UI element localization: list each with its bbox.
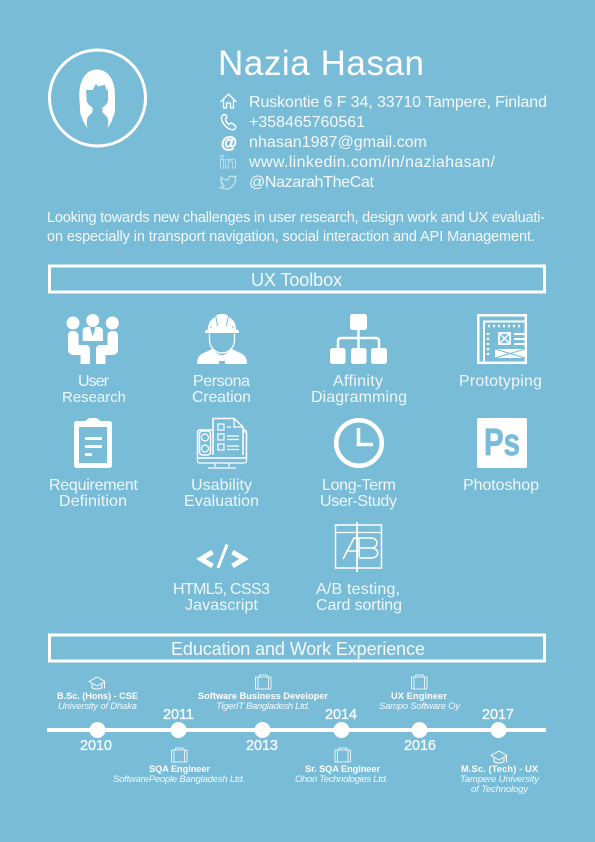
name heading: Nazia Hasan <box>218 44 424 83</box>
label <box>62 373 126 406</box>
entry: SQA Engineer: SoftwarePeople Bangladesh Ltd. <box>113 774 245 785</box>
entry: BSc: University of Dhaka <box>58 701 137 712</box>
tool: a/b testing <box>316 522 402 614</box>
label: Javascript <box>185 597 259 614</box>
entry: Sr. SQA Engineer <box>295 748 388 785</box>
label <box>192 373 251 406</box>
label: Creation <box>192 389 251 406</box>
label: Long-Term <box>322 477 396 494</box>
label: Photoshop <box>463 477 539 494</box>
year labels: 2010 <box>80 738 112 754</box>
tool: long-term user-study <box>320 420 397 510</box>
label: Usability <box>191 477 252 494</box>
entry: UX Engineer <box>379 675 461 712</box>
label: Diagramming <box>311 389 407 406</box>
icon: graduation cap <box>89 677 105 689</box>
tool: html css javascript <box>173 544 270 614</box>
contact details <box>220 94 547 191</box>
twitter: @NazarahTheCat <box>249 174 375 191</box>
year labels: 2014 <box>325 707 357 723</box>
entry: Sr. SQA Engineer: Sr. SQA Engineer <box>305 764 380 774</box>
tool: persona creation <box>192 314 251 406</box>
intro paragraph: on especially in transport navigation, social interaction and API Management. <box>47 229 535 245</box>
entry: Sr. SQA Engineer: Ohon Technologies Ltd. <box>295 774 388 785</box>
label: Requirement <box>49 477 139 494</box>
label <box>311 373 407 406</box>
icon: twitter <box>220 176 236 189</box>
phone: +358465760561 <box>249 114 365 131</box>
icon: at sign: @ <box>221 133 237 152</box>
entry: MSc <box>460 751 540 795</box>
tool: usability evaluation <box>184 418 259 510</box>
entry: BSc <box>57 677 138 712</box>
year labels: 2013 <box>246 738 278 754</box>
label: HTML5, CSS3 <box>173 581 270 598</box>
icon: briefcase <box>172 748 187 762</box>
label <box>320 477 397 510</box>
label: A/B testing, <box>316 581 400 598</box>
label: User <box>78 373 110 390</box>
entry: Software Business Developer <box>198 675 328 712</box>
icon: phone <box>221 114 236 130</box>
entry: BSc: B.Sc. (Hons) - CSE <box>57 691 138 701</box>
year labels: 2011 <box>163 707 194 723</box>
icon: code brackets <box>201 544 244 568</box>
entry: MSc: of Technology <box>471 784 529 795</box>
year labels: 2017 <box>482 707 514 723</box>
entry: SQA Engineer: SQA Engineer <box>149 764 210 774</box>
address: Ruskontie 6 F 34, 33710 Tampere, Finland <box>249 94 547 111</box>
section heading: UX Toolbox: UX Toolbox <box>251 270 342 290</box>
label <box>184 477 259 510</box>
icon: briefcase <box>412 675 427 689</box>
entry: UX Engineer: Sampo Software Oy <box>379 701 461 712</box>
email: nhasan1987@gmail.com <box>249 134 427 151</box>
timeline <box>47 675 546 795</box>
label: Research <box>62 389 126 406</box>
icon: briefcase <box>256 675 271 689</box>
tool: affinity diagramming <box>311 314 407 406</box>
icon: briefcase <box>335 748 350 762</box>
icon: home <box>221 94 236 108</box>
icon: graduation cap <box>491 751 507 763</box>
year labels <box>80 707 514 754</box>
label <box>173 581 270 614</box>
icon: clipboard <box>74 418 112 468</box>
icon: monitor with checklist <box>198 418 246 468</box>
section heading: UX Toolbox <box>50 266 544 292</box>
section heading: Education and Work Experience <box>50 635 544 661</box>
label: Card sorting <box>316 597 402 614</box>
label: User-Study <box>320 493 397 510</box>
entry: Software Business Developer: TigerIT Bangladesh Ltd. <box>216 701 310 712</box>
icon: linkedin <box>220 155 236 168</box>
tool: prototyping <box>459 315 542 390</box>
linkedin: www.linkedin.com/in/naziahasan/ <box>248 154 496 171</box>
tool: user research <box>62 314 126 406</box>
year labels: 2016 <box>404 738 436 754</box>
label: Persona <box>193 373 250 390</box>
label: Evaluation <box>184 493 259 510</box>
tool: requirement definition <box>49 418 139 510</box>
icon: engineer with helmet <box>197 314 247 364</box>
intro paragraph: Looking towards new challenges in user research, design work and UX evaluati- <box>47 210 545 226</box>
icon: meeting people <box>66 314 119 364</box>
icon: a/b split window <box>336 522 382 572</box>
label: Definition <box>59 493 127 510</box>
label: Affinity <box>333 373 383 390</box>
intro paragraph <box>47 210 545 245</box>
entry: UX Engineer: UX Engineer <box>391 691 447 701</box>
entry: SQA Engineer <box>113 748 245 785</box>
section heading: Education and Work Experience: Education and Work Experience <box>171 639 425 659</box>
entry: MSc: Tampere University <box>460 774 540 785</box>
entry: MSc: M.Sc. (Tech) - UX <box>461 764 539 774</box>
label <box>49 477 139 510</box>
icon: clock <box>336 420 382 466</box>
label: Prototyping <box>459 373 542 390</box>
entry: Software Business Developer: Software Business Developer <box>198 691 328 701</box>
icon: wireframe <box>478 315 526 363</box>
icon: hierarchy <box>330 314 387 364</box>
avatar <box>50 50 146 146</box>
label <box>316 581 402 614</box>
tool: photoshop <box>463 418 539 494</box>
timeline axis <box>47 722 546 738</box>
icon: photoshop logo: Ps <box>484 422 520 464</box>
